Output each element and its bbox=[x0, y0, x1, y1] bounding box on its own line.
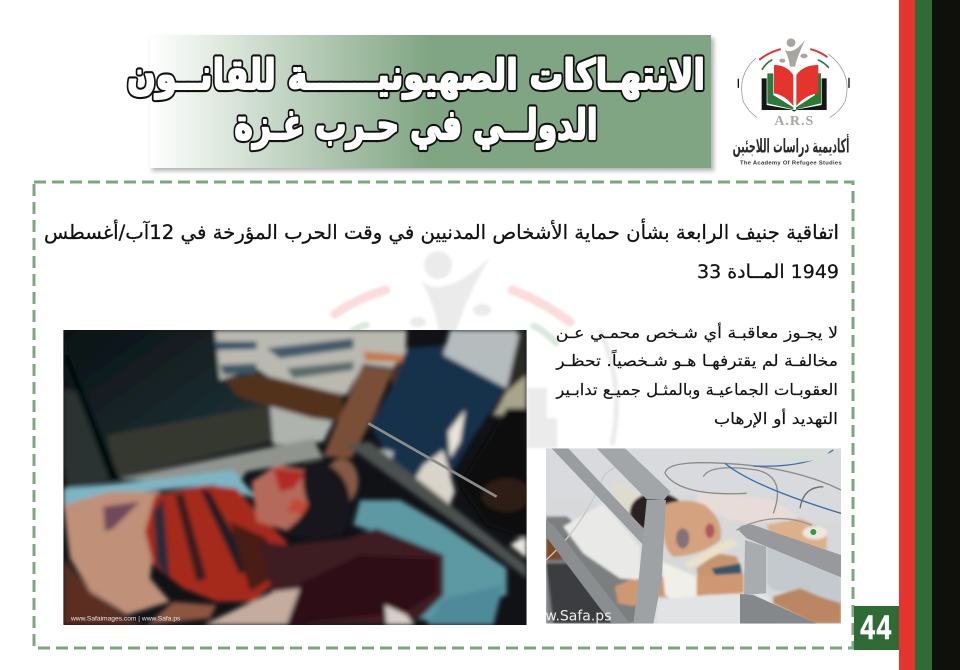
chest and arm bbox=[767, 518, 827, 550]
logo arcs bbox=[738, 49, 849, 117]
logo caption: The Academy Of Refugee Studies bbox=[740, 160, 842, 166]
article line 3: العقوبـات الجماعيـة وبالمثـل جميـع تدابـير bbox=[555, 380, 838, 400]
monitor cables bbox=[546, 450, 841, 560]
blue sheet bbox=[63, 470, 257, 508]
title bbox=[127, 51, 705, 149]
stretcher bar bbox=[368, 423, 497, 497]
logo figure bbox=[779, 38, 808, 67]
article line 2: مخالفـة لم يقترفهـا هـو شـخصياً. تحظـر bbox=[555, 349, 838, 371]
maroon blanket bbox=[260, 528, 443, 625]
stretcher rail bbox=[347, 442, 527, 578]
logo: Academy of Refugee Studies bbox=[733, 38, 849, 166]
hair bbox=[630, 492, 683, 531]
arms bbox=[225, 373, 343, 422]
logo initials: A.R.S bbox=[774, 114, 814, 129]
article line 4: التهديد أو الإرهاب bbox=[714, 409, 838, 429]
shirt bbox=[215, 330, 407, 395]
heading line 2: 1949 المــادة 33 bbox=[697, 261, 839, 283]
page number box bbox=[854, 606, 899, 650]
right-side flag stripes bbox=[899, 0, 960, 670]
heading line 1: اتفاقية جنيف الرابعة بشأن حماية الأشخاص المدنيين في وقت الحرب المؤرخة في 12آب/أغسطس bbox=[44, 219, 839, 244]
title band bbox=[150, 35, 714, 171]
photo: injured child in hospital bed bbox=[545, 448, 841, 624]
child's face bbox=[662, 501, 721, 557]
article line 1: لا يجـوز معاقبـة أي شـخص محمـي عـن bbox=[556, 322, 838, 343]
head and hair bbox=[252, 465, 313, 532]
jeans and right side bbox=[368, 343, 508, 478]
photo: wounded boy on a stretcher bbox=[63, 330, 532, 625]
title line 2: الدولــي في حـرب غـزة bbox=[234, 101, 598, 149]
title line 1: الانتهـاكات الصهيونيــــــة للقانــون bbox=[127, 51, 705, 99]
photo credit: www.Safaimages.com | www.Safa.ps bbox=[70, 615, 181, 622]
torso bbox=[63, 492, 170, 615]
title line 2: الدولــي في حـرب غـزة bbox=[234, 101, 598, 149]
logo book bbox=[762, 65, 827, 112]
heading text: Fourth Geneva Convention bbox=[44, 219, 839, 283]
ecg sensor bbox=[810, 529, 816, 535]
article 33 text block bbox=[555, 322, 838, 429]
page number: 44 bbox=[860, 609, 893, 647]
logo calligraphy: أكاديمية دراسات اللاجئين bbox=[733, 134, 849, 158]
red shirt bbox=[145, 485, 287, 602]
bed rails bbox=[546, 448, 841, 624]
pillow bbox=[563, 503, 640, 580]
background watermark: academy logo bbox=[335, 251, 616, 448]
dashed content frame bbox=[34, 182, 853, 648]
title line 1: الانتهـاكات الصهيونيــــــة للقانــون bbox=[127, 51, 705, 99]
hospital photo credit: w.Safa.ps bbox=[545, 608, 611, 624]
